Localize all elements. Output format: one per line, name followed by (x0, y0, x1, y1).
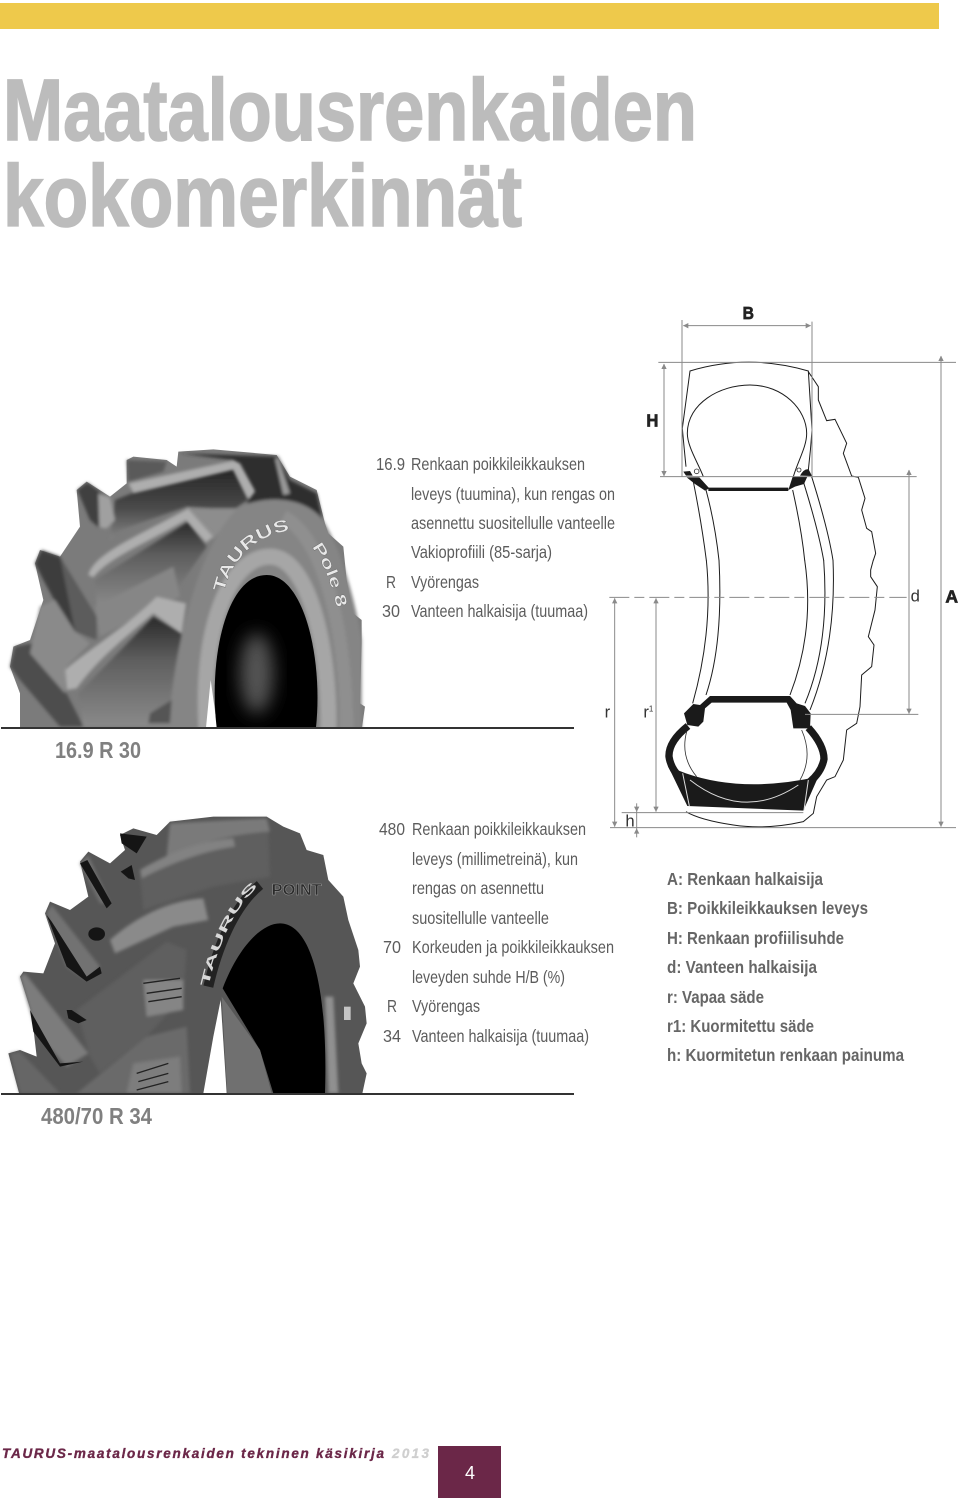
label H: H (646, 411, 658, 431)
spec list: 16.9 R 30: Vyörengas (411, 572, 479, 592)
label r1: 1 (649, 704, 654, 713)
spec list: 480/70 R 34: Vanteen halkaisija (tuumaa) (412, 1026, 589, 1046)
label A: A (945, 586, 958, 606)
dimension legend: A: Renkaan halkaisija (667, 869, 823, 889)
dimension legend (667, 869, 904, 1065)
title: Maatalousrenkaiden (3, 62, 697, 159)
spec list: 480/70 R 34: R (387, 996, 397, 1016)
spec list: 16.9 R 30: 30 (382, 601, 400, 621)
spec list: 480/70 R 34: leveyden suhde H/B (%) (412, 967, 565, 987)
sidewall lettering (212, 520, 347, 607)
dimension legend: r1: Kuormitettu säde (667, 1016, 814, 1036)
page number box: 4 (465, 1463, 475, 1483)
footer title: 2013 (391, 1446, 429, 1461)
spec list: 16.9 R 30 (376, 454, 615, 621)
spec list: 480/70 R 34: Korkeuden ja poikkileikkauksen (412, 937, 614, 957)
dimension lines: B and H (658, 320, 956, 477)
sidewall lettering: POINT (272, 882, 322, 899)
label h: h (625, 812, 635, 831)
dimension legend: h: Kuormitetun renkaan painuma (667, 1045, 904, 1065)
tread shadows (30, 833, 147, 1067)
upper half: tire section and rim (646, 303, 956, 560)
footer title: TAURUS-maatalousrenkaiden tekninen käsikirja (2, 1446, 384, 1461)
spec list: 16.9 R 30: Vanteen halkaisija (tuumaa) (411, 601, 588, 621)
dimension lines: r, r1, h, d, A (609, 356, 956, 837)
photo: tire 480/70 R 34 (8, 816, 367, 1093)
dimension legend: B: Poikkileikkauksen leveys (667, 898, 868, 918)
spec list: 480/70 R 34: 70 (383, 937, 401, 957)
page number box (438, 1446, 501, 1498)
caption: 16.9 R 30: 16.9 R 30 (55, 737, 141, 763)
top yellow bar (0, 3, 939, 29)
raised lug highlights (65, 461, 255, 690)
label d: d (911, 587, 920, 606)
spec list: 480/70 R 34: 480 (379, 819, 405, 839)
label B: B (743, 303, 754, 323)
tire cross-section diagram (605, 303, 958, 837)
spec list: 16.9 R 30: asennettu suositellulle vanteelle (411, 513, 615, 533)
tread streaks (137, 978, 182, 1090)
sidewall lettering (200, 881, 351, 1020)
title (3, 62, 697, 245)
spec list: 16.9 R 30: Vakioprofiili (85-sarja) (411, 542, 552, 562)
spec list: 16.9 R 30: R (386, 572, 396, 592)
lower half: loaded tire and measurements (605, 356, 958, 837)
label r: r (605, 702, 611, 721)
dimension legend: r: Vapaa säde (667, 987, 764, 1007)
sidewall lettering: TAURUS (200, 883, 256, 985)
title: kokomerkinnät (3, 148, 522, 245)
dimension legend: d: Vanteen halkaisija (667, 957, 817, 977)
sidewall lettering: TAURUS (212, 520, 288, 590)
rim opening (203, 923, 325, 1093)
rule under first tire (1, 727, 574, 729)
sidewall lettering: Pole 8 (312, 542, 347, 607)
photo: tire 16.9 R 30 (8, 449, 365, 727)
rim opening (206, 575, 317, 728)
spec list: 480/70 R 34: leveys (millimetreinä), kun (412, 849, 578, 869)
spec list: 480/70 R 34: suositellulle vanteelle (412, 908, 549, 928)
bulged bead ring (668, 696, 824, 811)
spec list: 480/70 R 34: Renkaan poikkileikkauksen (412, 819, 586, 839)
spec list: 16.9 R 30: leveys (tuumina), kun rengas on (411, 484, 615, 504)
spec list: 480/70 R 34: Vyörengas (412, 996, 480, 1016)
caption: 480/70 R 34: 480/70 R 34 (41, 1103, 152, 1129)
spec list: 480/70 R 34: rengas on asennettu (412, 878, 544, 898)
spec list: 16.9 R 30: 16.9 (376, 454, 405, 474)
spec list: 16.9 R 30: Renkaan poikkileikkauksen (411, 454, 585, 474)
spec list: 480/70 R 34: 34 (383, 1026, 401, 1046)
dimension legend: H: Renkaan profiilisuhde (667, 928, 844, 948)
rule under second tire (1, 1093, 574, 1095)
spec list: 480/70 R 34 (379, 819, 614, 1046)
label r1: r (643, 702, 649, 721)
